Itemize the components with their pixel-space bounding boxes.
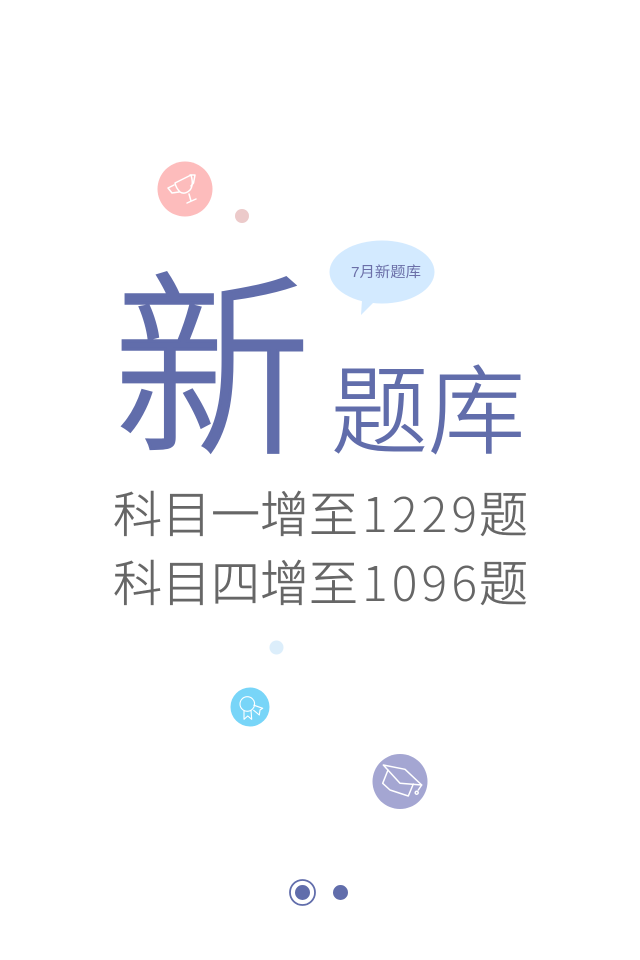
text line: subject four: 题	[479, 558, 528, 612]
icon: trophy badge	[158, 162, 212, 216]
bubble text: 7月新题库	[351, 264, 421, 281]
pagination dots	[290, 880, 348, 905]
icon: graduation cap badge	[372, 754, 428, 809]
speech bubble	[330, 240, 434, 315]
icon: ribbon badge	[230, 688, 270, 726]
active page indicator	[290, 880, 315, 905]
text line: subject four: 科目四增至	[113, 558, 358, 612]
decorative dot: pink	[235, 209, 249, 223]
text line: subject one: 题	[479, 489, 528, 543]
heading: 新: 新	[113, 260, 311, 480]
text line: subject one	[113, 476, 528, 546]
text line: subject four: 1096	[362, 545, 477, 615]
text line: subject one: 1229	[362, 476, 477, 546]
inactive page indicator	[333, 885, 348, 900]
decorative dot: blue	[270, 640, 284, 654]
text line: subject one: 科目一增至	[113, 489, 358, 543]
text line: subject four	[113, 545, 528, 615]
heading: 题库: 题库	[331, 358, 525, 467]
